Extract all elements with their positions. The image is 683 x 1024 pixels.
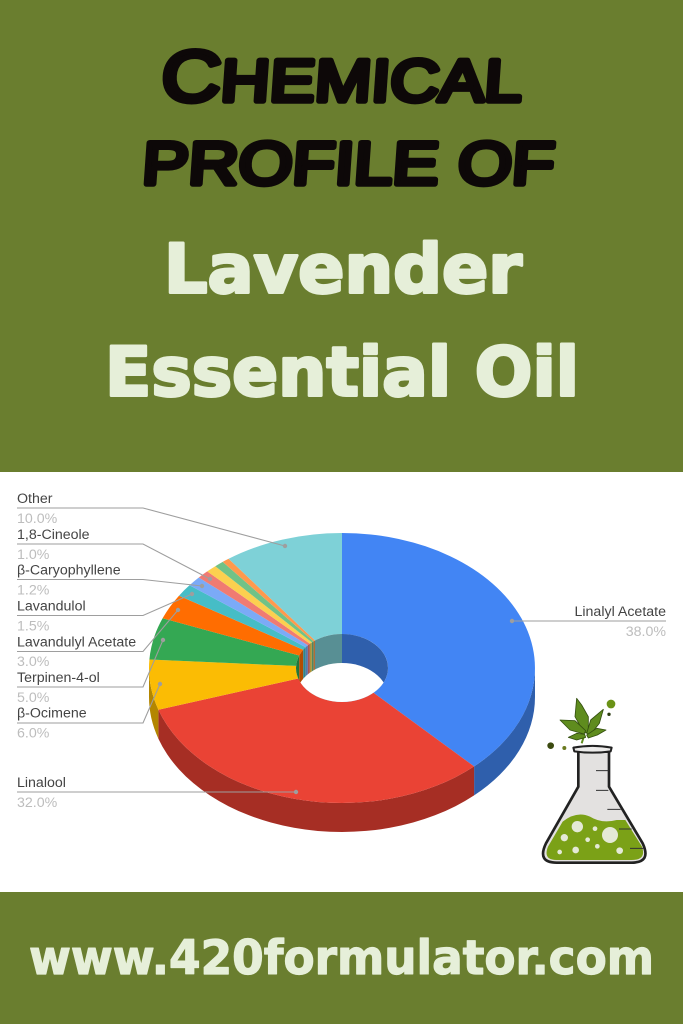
- droplets: [547, 700, 615, 750]
- label: Terpinen-4-ol: 5.0%: [17, 690, 50, 706]
- title: Chemical profile of: [140, 37, 557, 197]
- icon: flask with cannabis leaf: [543, 698, 645, 863]
- label: 1,8-Cineole: [17, 527, 90, 563]
- label: 1,8-Cineole: 1,8-Cineole: [17, 527, 90, 543]
- label: Lavandulol: [17, 598, 86, 634]
- leader lines and dots: [17, 508, 666, 794]
- label: beta-Caryophyllene: β-Caryophyllene: [17, 562, 121, 578]
- chart: 3D donut pie: [149, 533, 535, 832]
- panel: chart background: [0, 472, 683, 892]
- slice: Lavandulol 1.5%: [179, 585, 306, 650]
- flask liquid: [547, 815, 643, 860]
- pie side walls: [149, 668, 535, 832]
- flask rim: [573, 746, 612, 753]
- label: Lavandulyl Acetate: [17, 634, 136, 670]
- slice: Lavandulyl Acetate 3%: [163, 596, 303, 656]
- label: Other: 10.0%: [17, 511, 58, 527]
- heading line: Chemical: CHEMICAL: [159, 37, 525, 117]
- slice: Linalyl Acetate 38%: [342, 533, 535, 766]
- flask body: [543, 752, 645, 863]
- label: beta-Caryophyllene: 1.2%: [17, 582, 50, 598]
- slice: 1,8-Cineole 1%: [199, 571, 310, 645]
- label: Linalool: 32.0%: [17, 795, 58, 811]
- slice: beta-Caryophyllene 1.2%: [190, 578, 308, 647]
- panel: footer background: [0, 892, 683, 1024]
- slice: minor yellow: [207, 566, 312, 644]
- heading line: profile of: PROFILE OF: [140, 130, 557, 197]
- heading: Lavender: Lavender: [164, 230, 522, 310]
- label: Terpinen-4-ol: Terpinen-4-ol: [17, 670, 100, 686]
- label: beta-Ocimene: [17, 706, 87, 742]
- slice: minor green: [215, 562, 314, 642]
- label: beta-Caryophyllene: [17, 562, 121, 598]
- measure ticks: [596, 771, 643, 848]
- label: Linalool: [17, 775, 66, 811]
- heading: Essential Oil: Essential Oil: [105, 334, 579, 412]
- label: 1,8-Cineole: 1.0%: [17, 547, 50, 563]
- slice: Terpinen-4-ol 5%: [149, 618, 299, 666]
- label: Lavandulyl Acetate: 3.0%: [17, 654, 50, 670]
- label: Lavandulyl Acetate: Lavandulyl Acetate: [17, 634, 136, 650]
- label: Linalyl Acetate: Linalyl Acetate: [574, 604, 666, 620]
- footer URL: www.420formulator.com: [29, 931, 654, 986]
- panel: header background: [0, 0, 683, 472]
- bubbles: [557, 821, 623, 854]
- label: beta-Ocimene: β-Ocimene: [17, 706, 87, 722]
- donut hole with inner wall: [296, 634, 388, 702]
- label: beta-Ocimene: 6.0%: [17, 726, 50, 742]
- label: Linalyl Acetate: 38.0%: [626, 624, 666, 640]
- label: Linalool: Linalool: [17, 775, 66, 791]
- slice: beta-Ocimene 6%: [149, 660, 298, 710]
- cannabis leaf: [560, 698, 606, 743]
- slice: Other 10%: [229, 533, 342, 640]
- label: Terpinen-4-ol: [17, 670, 100, 706]
- label: Other: [17, 491, 58, 527]
- slice: minor orange: [223, 559, 315, 641]
- label: Linalyl Acetate: [574, 604, 666, 640]
- label: Other: Other: [17, 491, 53, 507]
- label: Lavandulol: Lavandulol: [17, 598, 86, 614]
- slice: Linalool 32%: [158, 678, 474, 803]
- label: Lavandulol: 1.5%: [17, 618, 50, 634]
